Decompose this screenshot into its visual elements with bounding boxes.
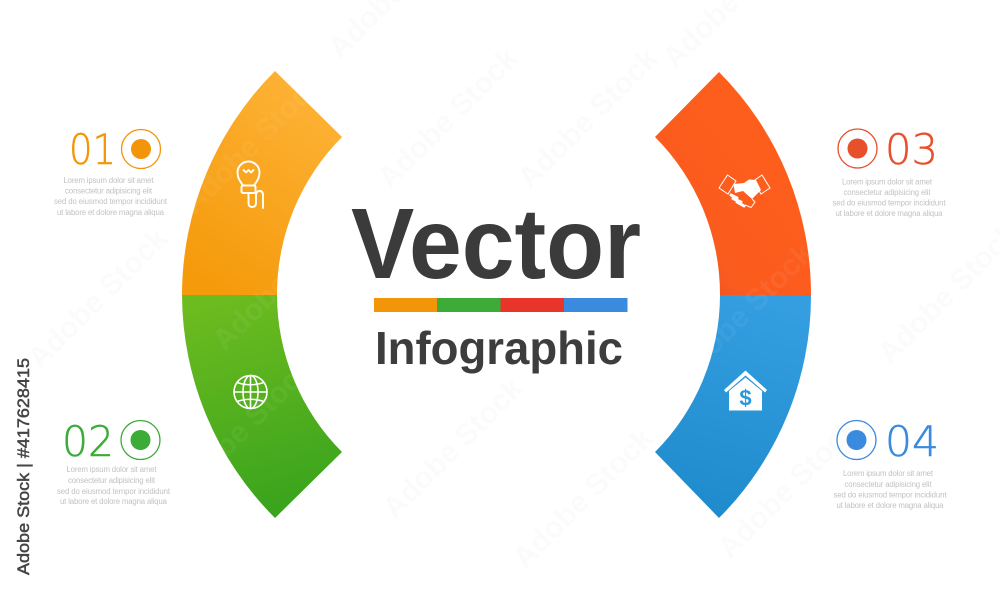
arc watermark: Adobe Stock	[667, 237, 820, 390]
text block 03: sed do eiusmod tempor incididunt	[832, 198, 946, 208]
panel: green arc segment	[182, 295, 342, 518]
marker 03	[838, 129, 877, 168]
icon: globe	[234, 376, 267, 408]
panel: blue arc segment	[655, 295, 811, 518]
side credit text: Adobe Stock | #417628415	[14, 358, 33, 575]
arc watermark: Adobe Stock	[167, 352, 320, 505]
text block 02: sed do eiusmod tempor incididunt	[57, 487, 171, 496]
text block 03	[832, 178, 946, 218]
number 02: 02	[62, 417, 114, 466]
text block 02: consectetur adipisicing elit	[68, 476, 156, 485]
text block 01: consectetur adipisicing elit	[65, 186, 153, 196]
icon: house with dollar: $	[739, 386, 752, 410]
text block 01: Lorem ipsum dolor sit amet	[64, 176, 154, 185]
block 04	[834, 417, 947, 510]
block 01	[54, 125, 168, 217]
marker 01	[122, 130, 160, 168]
text block 03: ut labore et dolore magna aliqua	[836, 209, 943, 218]
text block 02: ut labore et dolore magna aliqua	[60, 497, 168, 506]
text block 02	[57, 465, 171, 506]
panel: orange arc segment	[182, 71, 342, 295]
marker 02	[121, 420, 160, 460]
block 02	[57, 417, 171, 506]
text block 04: consectetur adipisicing elit	[844, 480, 932, 489]
panel: red arc segment	[655, 72, 811, 295]
arc watermark	[167, 67, 820, 505]
text block 04	[834, 469, 947, 510]
colour divider bar	[374, 298, 628, 312]
text block 01: sed do eiusmod tempor incididunt	[54, 197, 168, 206]
text block 02: Lorem ipsum dolor sit amet	[66, 465, 157, 474]
icon: house with dollar	[724, 370, 767, 410]
icon: handshake	[719, 175, 770, 208]
text block 04: sed do eiusmod tempor incididunt	[834, 490, 947, 500]
icon: light bulb	[238, 162, 263, 208]
title: Vector: Vector	[351, 188, 641, 300]
number 03: 03	[885, 125, 938, 174]
arc watermark: Adobe Stock	[177, 67, 330, 220]
block 03	[832, 125, 946, 218]
number 04: 04	[885, 417, 939, 466]
subtitle: Infographic: Infographic	[375, 322, 623, 374]
arc watermark: Adobe	[207, 268, 296, 357]
text block 01	[54, 176, 168, 217]
text block 04: ut labore et dolore magna aliqua	[836, 501, 944, 510]
number 01: 01	[69, 125, 116, 174]
text block 03: consectetur adipisicing elit	[844, 188, 931, 197]
text block 01: ut labore et dolore magna aliqua	[57, 208, 165, 217]
text block 03: Lorem ipsum dolor sit amet	[842, 178, 933, 186]
marker 04	[837, 420, 876, 460]
text block 04: Lorem ipsum dolor sit amet	[843, 469, 934, 478]
